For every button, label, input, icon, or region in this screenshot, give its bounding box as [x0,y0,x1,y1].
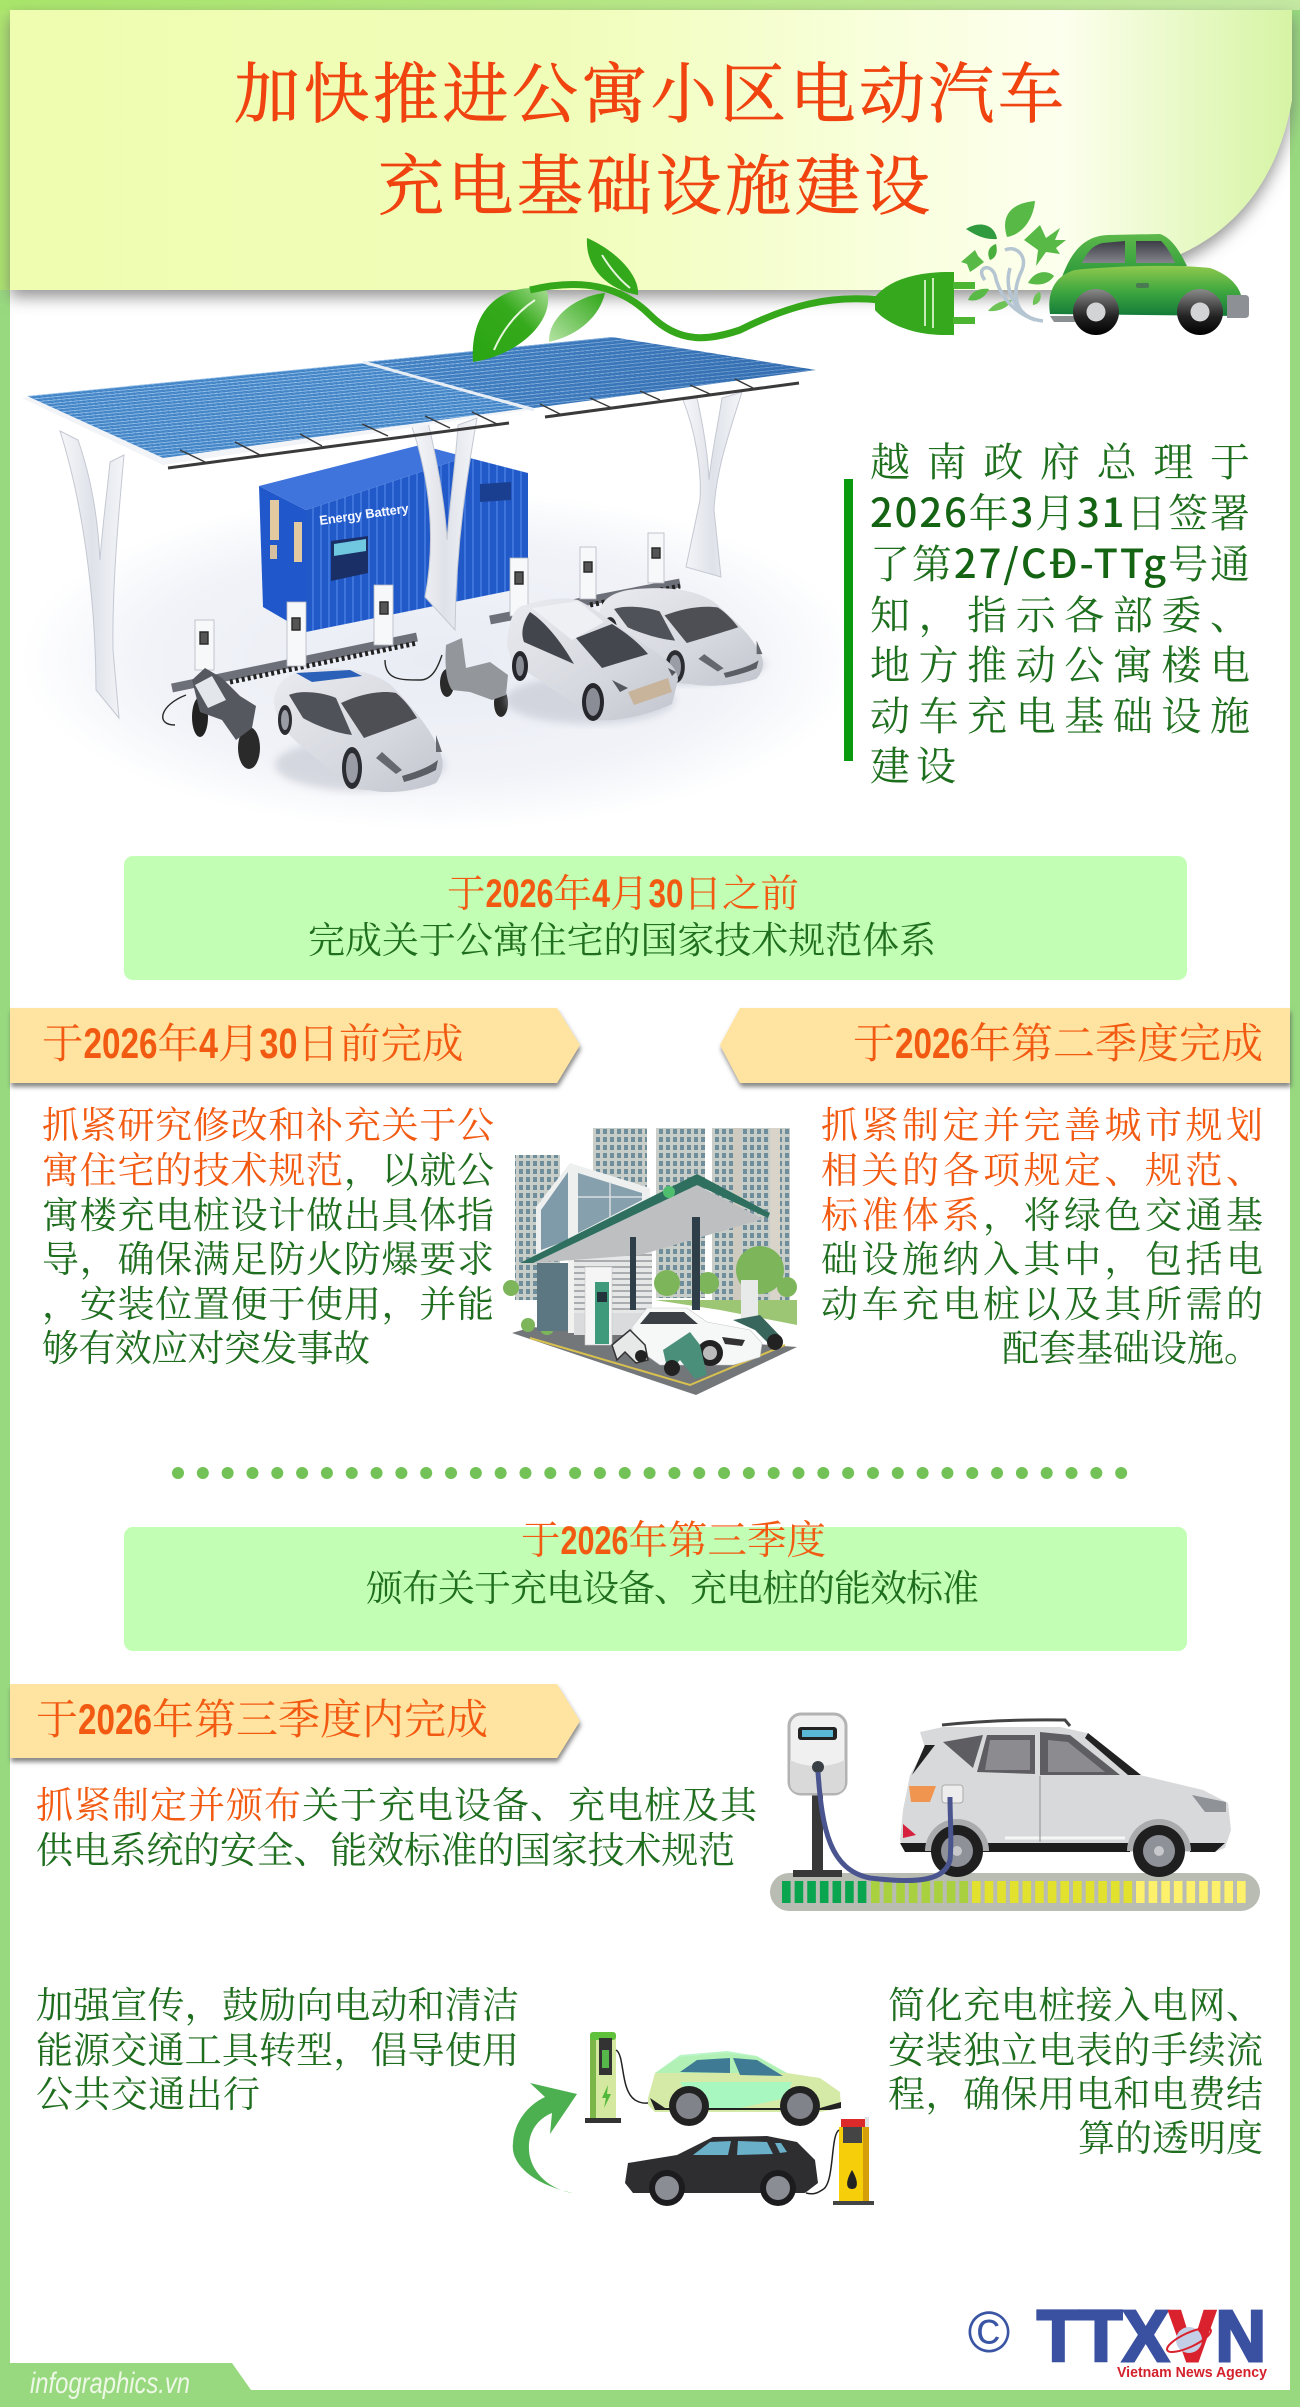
banner: right [720,1008,1290,1083]
office glass box [536,1163,652,1335]
charging cable [818,1772,951,1881]
plug, cord and leaves [473,238,975,362]
box: third quarter 2026 [124,1510,1187,1651]
illustration: car charging with battery bar [770,1714,1260,1911]
dotted divider [178,1467,1122,1479]
title: 加快推进公寓小区电动汽车 [234,41,1064,136]
chargers [195,533,664,670]
pillar left [60,431,124,718]
fuel car [625,2136,818,2206]
intro text [870,431,1250,792]
trees [503,1246,797,1335]
illustration: apartment charging station [503,1128,797,1395]
text block: left task: 寓楼充电桩设计做出具体指 [42,1185,494,1239]
intro text: 动车充电基础设施 [870,685,1250,742]
text block: left task: ，安装位置便于使用，并能 [42,1274,494,1328]
lawn and ground [655,1300,797,1325]
pillar middle [412,418,477,630]
battery container [259,445,528,632]
towers [515,1128,790,1303]
text block: left task: 够有效应对突发事故 [42,1318,370,1372]
solar panel left [22,363,528,468]
banner: third quarter: 于2026年第三季度内完成 [36,1687,488,1747]
fuel pump [806,2117,874,2205]
title [234,41,1064,228]
box body: 完成关于公寓住宅的国家技术规范体系 [308,910,936,964]
charger post [789,1714,846,1877]
pavement [512,1327,797,1395]
SUV [900,1720,1231,1877]
text block: promote clean transport [36,1975,519,2118]
intro text: 建设 [870,735,956,792]
text block: simplify connection: 程，确保用电和电费结 [888,2064,1263,2118]
exhaust leaves [961,201,1066,321]
intro text: 了第27/CĐ-TTg号通 [870,532,1250,590]
text block: simplify connection: 安装独立电表的手续流 [888,2020,1263,2074]
electric car [648,2051,841,2126]
text block: third quarter task: 供电系统的安全、能效标准的国家技术规范 [36,1820,735,1874]
battery bar [770,1873,1260,1911]
text block: right task: 标准体系，将绿色交通基 [821,1185,1263,1239]
scooter [440,638,508,717]
blue roof reflection [296,670,362,682]
logo TTXVN: TTXVN [1037,2297,1266,2377]
plug prongs [953,282,975,324]
motorbike [192,668,260,769]
car far right [599,588,765,686]
box heading: 于2026年第三季度 [521,1510,826,1566]
text block: right task: 动车充电桩以及其所需的 [821,1274,1263,1328]
scooters [612,1315,783,1379]
label: Energy Battery: Energy Battery [318,500,410,528]
text block: left task: 抓紧研究修改和补充关于公 [42,1095,494,1149]
text block: right task: 础设施纳入其中，包括电 [821,1229,1263,1283]
cord [530,284,880,338]
canopy [520,1174,770,1263]
text block: right task: 抓紧制定并完善城市规划 [821,1095,1263,1149]
box: before 30 April 2026 [124,856,1187,980]
intro text: 地方推动公寓楼电 [870,634,1250,691]
canopy columns [630,1217,700,1310]
text block: simplify connection: 简化充电桩接入电网、 [888,1975,1263,2029]
charger screens and cables [163,548,660,725]
solar panel right [363,337,816,417]
station charger [585,1267,758,1345]
white car [632,1308,762,1366]
illustration: solar carport with chargers and cars [20,337,860,830]
text block: left task: 寓住宅的技术规范，以就公 [42,1140,494,1194]
text block: third quarter task: 抓紧制定并颁布关于充电设备、充电桩及其 [36,1775,759,1829]
text block: left task: 导，确保满足防火防爆要求 [42,1229,494,1283]
intro text: 知，指示各部委、 [870,584,1250,641]
copyright symbol: © [968,2300,1010,2365]
text block: simplify connection: 算的透明度 [1078,2108,1263,2162]
charging islands [172,583,680,688]
banner: right: 于2026年第二季度完成 [853,1011,1263,1071]
text block: promote clean transport: 能源交通工具转型，倡导使用 [36,2020,519,2074]
leaf large [473,288,548,362]
header panel [10,10,1292,290]
title: 充电基础设施建设 [378,133,930,228]
text block: right task: 相关的各项规定、规范、 [821,1140,1263,1194]
logo TTXVN: Vietnam News Agency [1117,2364,1268,2381]
box body: 颁布关于充电设备、充电桩的能效标准 [366,1558,979,1612]
intro text: 2026年3月31日签署 [870,481,1250,539]
text block: left task [42,1095,494,1372]
leaf light [549,293,605,342]
green car [1049,234,1249,335]
arrow [513,2083,577,2193]
text block: right task [821,1095,1263,1372]
banner: left [10,1008,580,1083]
intro accent bar [844,479,853,761]
intro text: 越南政府总理于 [870,431,1250,488]
pillar right [683,392,742,577]
SUV [505,598,678,724]
text block: simplify connection [888,1975,1263,2162]
banner: third quarter [10,1684,580,1758]
plug body [875,272,954,335]
illustration: fuel car to electric car [513,2032,874,2206]
floor glow [20,490,860,830]
car front [274,669,445,792]
exhaust swirl [982,249,1043,321]
text block: right task: 配套基础设施。 [1002,1318,1261,1372]
banner: left: 于2026年4月30日前完成 [42,1010,464,1070]
text block: third quarter task [36,1775,759,1874]
text block: promote clean transport: 公共交通出行 [36,2064,260,2118]
leaf top [587,238,638,295]
text block: promote clean transport: 加强宣传，鼓励向电动和清洁 [36,1975,519,2029]
box heading: 于2026年4月30日之前 [447,864,799,919]
footer tab: infographics.vn [30,2367,190,2400]
electric charger [585,2032,650,2123]
